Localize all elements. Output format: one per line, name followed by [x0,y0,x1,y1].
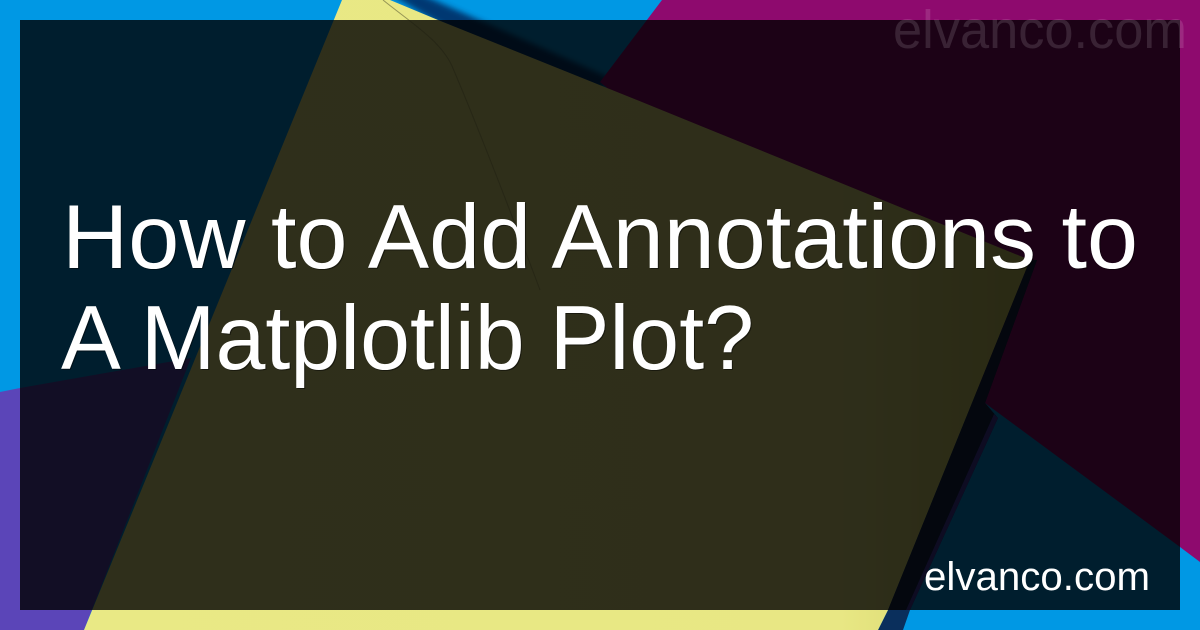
panel shadow detail: dark band right of yellow paper [888,260,1037,610]
title line 1: How to Add Annotations to [62,187,1138,288]
background: magenta paper [600,0,1200,562]
background: yellow paper [84,0,1030,630]
watermark: elvanco.com [893,0,1187,60]
background: shadow beside yellow paper right edge [878,260,1037,630]
site name: elvanco.com [924,555,1150,599]
background: purple paper [0,358,191,630]
paper crease [383,0,540,290]
title [61,187,1138,389]
title line 2: A Matplotlib Plot? [61,288,754,389]
panel shadow detail: thin purple line at teal edge [906,414,998,610]
background: shadow beside yellow paper top edge [390,0,610,90]
